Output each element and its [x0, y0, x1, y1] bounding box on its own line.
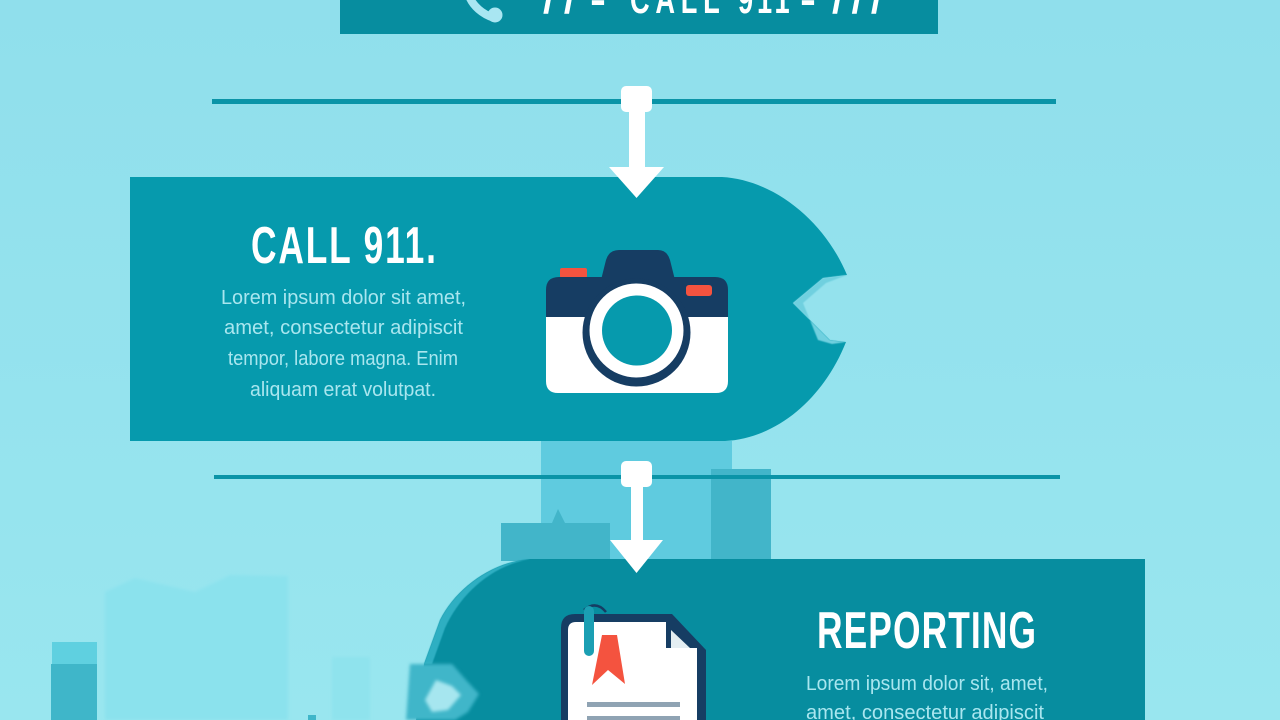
- icon: phone: [469, 0, 502, 22]
- divider line 2: [214, 475, 1060, 479]
- text block: call 911 body: aliquam erat volutpat.: [250, 379, 436, 401]
- blob ornament: [406, 664, 479, 720]
- text block: reporting body: [806, 673, 1048, 720]
- text block: call 911 body: [221, 287, 466, 401]
- heading: call 911: CALL 911.: [251, 217, 436, 275]
- icon: camera: [546, 250, 728, 393]
- city skyline background: [51, 441, 771, 720]
- panel: call 911: [130, 177, 847, 441]
- top banner: [340, 0, 938, 34]
- arrow 2: [610, 461, 663, 573]
- panel: reporting: [406, 559, 1145, 720]
- arrow 1: [609, 86, 664, 198]
- banner heading: [543, 0, 882, 22]
- icon: paperclip: [584, 605, 606, 612]
- heading: reporting: REPORTING: [817, 602, 1036, 660]
- text block: call 911 body: tempor, labore magna. Enim: [228, 348, 458, 370]
- text block: call 911 body: Lorem ipsum dolor sit amet,: [221, 287, 466, 309]
- text block: reporting body: Lorem ipsum dolor sit, amet,: [806, 673, 1048, 695]
- icon: report document: [561, 605, 706, 720]
- divider line 1: [212, 99, 1056, 104]
- text block: call 911 body: amet, consectetur adipiscit: [224, 317, 463, 339]
